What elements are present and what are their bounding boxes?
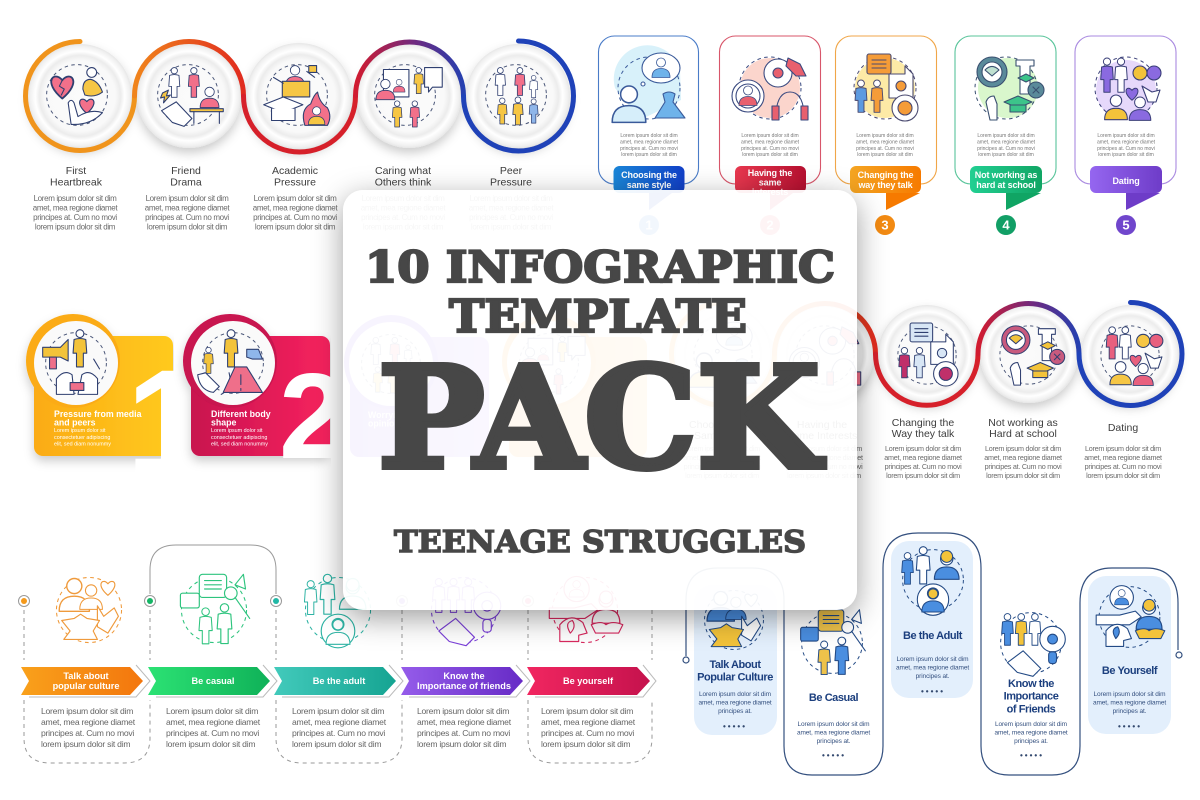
card: be yourself: •••••: [1118, 722, 1142, 731]
card: be yourself: Lorem ipsum dolor sit dim: [1094, 691, 1165, 698]
card 1: choosing the same style: 1: [645, 218, 653, 232]
body text: step 2: principes at. Cum no movi: [166, 728, 259, 738]
card: pressure from media and peers: and peers: [54, 418, 96, 428]
card: pressure from media and peers: Pressure from media: [54, 409, 142, 419]
card 5: dating: Dating: [1112, 176, 1140, 186]
body text: step 4: amet, mea regione diamet: [417, 717, 512, 727]
card 2: having the same interests: amet, mea regione diamet: [741, 139, 800, 145]
card 4: not working as hard at school: Lorem ipsum dolor sit dim: [977, 133, 1035, 139]
card 1: choosing the same style: Lorem ipsum dolor sit dim: [620, 133, 678, 139]
body text: column 3: amet, mea regione diamet: [884, 453, 962, 462]
panel: bottom-left chevron step timeline: [18, 545, 656, 763]
icon: friend drama: [158, 65, 223, 126]
panel: top-right numbered ribbon cards: [598, 36, 1176, 235]
labels: friend drama: Friend: [171, 165, 201, 177]
body text: column 4: amet, mea regione diamet: [984, 453, 1062, 462]
body text: column 1: Lorem ipsum dolor sit dim: [34, 194, 117, 203]
connector outline: [686, 533, 1178, 775]
card: pressure from media and peers: [26, 314, 209, 506]
body text: step 5: principes at. Cum no movi: [541, 728, 634, 738]
chevron: be yourself: [527, 665, 656, 697]
card: talk about popular culture: Lorem ipsum dolor sit dim: [699, 691, 771, 698]
card 5: dating: principes at. Cum no movi: [1097, 146, 1155, 152]
card 5: dating: 5: [1122, 218, 1130, 232]
body text: column 3: Lorem ipsum dolor sit dim: [885, 444, 961, 453]
card 1: choosing the same style: [598, 36, 698, 235]
chevron: know the importance of friends: [401, 665, 530, 697]
card: different body shape: shape: [211, 418, 237, 428]
card 2: having the same interests: lorem ipsum dolor sit dim: [742, 152, 798, 158]
card: talk about popular culture: principes at.: [718, 708, 752, 715]
body text: step 2: Lorem ipsum dolor sit dim: [166, 706, 258, 716]
body text: faded column 1: Lorem ipsum dolor sit dim: [684, 444, 760, 453]
dashed frame lines: [24, 545, 652, 763]
connector end dots: [683, 652, 1182, 663]
card: know the importance of friends: •••••: [1020, 751, 1044, 760]
card: be yourself: amet, mea regione diamet: [1093, 699, 1166, 706]
card: different body shape: [183, 314, 347, 484]
card: be casual: Lorem ipsum dolor sit dim: [798, 721, 869, 728]
body text: column 4: lorem ipsum dolor sit dim: [986, 471, 1060, 480]
heading: template: TEMPLATE: [449, 290, 747, 343]
body text: column 3: principes at. Cum no movi: [885, 462, 962, 471]
body text: faded column 2: Lorem ipsum dolor sit dim: [786, 444, 862, 453]
card 4: not working as hard at school: [955, 36, 1056, 235]
card 1: choosing the same style: lorem ipsum dolor sit dim: [621, 152, 677, 158]
icon: heartbreak: [47, 65, 107, 125]
labels: academic pressure: Academic: [272, 165, 318, 177]
icon: caring what others think: [375, 65, 442, 127]
body text: column 4: amet, mea regione diamet: [361, 204, 446, 212]
body text: step 3: principes at. Cum no movi: [292, 728, 385, 738]
card: be the adult: [891, 541, 973, 698]
icon: be the adult: [304, 574, 371, 648]
icon: be casual: [180, 574, 250, 644]
card: different body shape: 2: [279, 348, 347, 484]
body text: column 5: amet, mea regione diamet: [469, 204, 554, 212]
panel: middle-left numbered colour cards: [26, 314, 647, 506]
card 1: choosing the same style: same style: [627, 180, 671, 190]
panel: central white title card: [343, 190, 857, 610]
card: pressure from media and peers: 1: [126, 338, 209, 506]
card: talk about popular culture: Popular Culture: [697, 672, 773, 684]
card 5: dating: lorem ipsum dolor sit dim: [1098, 152, 1154, 158]
card: pressure from media and peers: Lorem ipsum dolor sit: [54, 428, 106, 434]
card 2: having the same interests: same: [759, 178, 781, 188]
card 5: dating: amet, mea regione diamet: [1097, 139, 1156, 145]
card: be yourself: Be Yourself: [1102, 665, 1158, 677]
body text: column 4: principes at. Cum no movi: [985, 462, 1062, 471]
icon: choosing the same style (faded): [688, 322, 757, 387]
card 1: choosing the same style: amet, mea regione diamet: [620, 139, 679, 145]
body text: column 1: principes at. Cum no movi: [33, 213, 117, 222]
body text: column 3: principes at. Cum no movi: [253, 213, 337, 222]
card 4: not working as hard at school: lorem ipsum dolor sit dim: [978, 152, 1034, 158]
body text: step 1: lorem ipsum dolor sit dim: [41, 739, 130, 749]
card 2: having the same interests: 2: [766, 218, 774, 232]
body text: step 5: amet, mea regione diamet: [541, 717, 636, 727]
timeline dots: [18, 596, 534, 606]
icon: peer pressure: [486, 65, 546, 125]
card: different body shape: Lorem ipsum dolor sit: [211, 428, 263, 434]
card: be casual: •••••: [822, 751, 846, 760]
card: faded purple card behind panel: Worrying about: [368, 410, 433, 420]
card 2: having the same interests: Lorem ipsum dolor sit dim: [741, 133, 799, 139]
card 4: not working as hard at school: principes at. Cum no movi: [977, 146, 1035, 152]
card 4: not working as hard at school: amet, mea regione diamet: [977, 139, 1036, 145]
labels: changing the way they talk: Changing the: [892, 417, 954, 429]
card: know the importance of friends: amet, mea regione diamet: [994, 729, 1068, 736]
chevron: talk about popular culture: popular culture: [53, 681, 119, 691]
icon: changing the way they talk: [898, 323, 958, 386]
card: be yourself: principes at.: [1113, 708, 1147, 715]
card: know the importance of friends: Lorem ipsum dolor sit dim: [995, 721, 1067, 728]
labels: first heartbreak: First: [66, 165, 86, 177]
card 3: changing the way they talk: way they talk: [857, 180, 914, 190]
body text: column 4: Lorem ipsum dolor sit dim: [362, 194, 445, 203]
card: pressure from media and peers: consectetuer adipiscing: [54, 435, 110, 441]
card: talk about popular culture: [694, 585, 777, 735]
labels: faded having the same interests: Having the: [797, 419, 847, 431]
body text: column 5: amet, mea regione diamet: [1084, 453, 1162, 462]
card 3: changing the way they talk: lorem ipsum dolor sit dim: [857, 152, 913, 158]
card 1: choosing the same style: principes at. Cum no movi: [620, 146, 678, 152]
card 4: not working as hard at school: 4: [1002, 218, 1010, 232]
card: different body shape: elit, sed diam nonummy: [211, 442, 268, 448]
labels: friend drama: Drama: [170, 176, 202, 188]
labels: academic pressure: Pressure: [274, 176, 316, 188]
body text: faded column 1: lorem ipsum dolor sit dim: [685, 471, 759, 480]
serpentine ring line: [25, 41, 573, 152]
body text: faded column 2: principes at. Cum no movi: [786, 462, 863, 471]
heading: 10 infographic: 10 INFOGRAPHIC: [365, 243, 835, 293]
icon: know the importance of friends: [431, 577, 501, 646]
body text: step 3: amet, mea regione diamet: [292, 717, 387, 727]
card: faded purple card behind panel: [344, 315, 489, 457]
body text: column 5: lorem ipsum dolor sit dim: [1086, 471, 1160, 480]
card 2: having the same interests: [720, 36, 820, 235]
body text: column 4: Lorem ipsum dolor sit dim: [985, 444, 1061, 453]
card: be casual: [797, 610, 870, 760]
chevron: be yourself: Be yourself: [563, 676, 614, 686]
body text: faded column 1: amet, mea regione diamet: [683, 453, 761, 462]
card: talk about popular culture: amet, mea regione diamet: [698, 699, 772, 706]
card 3: changing the way they talk: 3: [881, 218, 889, 232]
labels: changing the way they talk: Way they talk: [892, 428, 955, 440]
card 2: having the same interests: Having the: [748, 168, 792, 178]
chevron: be casual: [148, 665, 277, 697]
labels: caring what others think: Caring what: [375, 165, 431, 177]
body text: step 2: lorem ipsum dolor sit dim: [166, 739, 255, 749]
heading: pack: PACK: [378, 337, 824, 501]
card: faded orange card behind panel: [502, 314, 647, 457]
labels: not working as hard at school: Not working as: [988, 417, 1058, 429]
body text: column 2: amet, mea regione diamet: [145, 204, 230, 212]
card 5: dating: Lorem ipsum dolor sit dim: [1097, 133, 1155, 139]
labels: faded having the same interests: Same Interests: [787, 430, 857, 442]
chevron: be casual: Be casual: [192, 676, 234, 686]
body text: column 4: lorem ipsum dolor sit dim: [363, 222, 444, 232]
body text: column 5: lorem ipsum dolor sit dim: [471, 222, 552, 232]
card 3: changing the way they talk: amet, mea regione diamet: [856, 139, 915, 145]
icon: same interests (faded): [789, 326, 861, 385]
card: faded purple card behind panel: opinions: [368, 418, 405, 428]
panel: middle-right serpentine ring timeline: [672, 302, 1182, 480]
body text: step 1: Lorem ipsum dolor sit dim: [41, 706, 133, 716]
body text: column 3: amet, mea regione diamet: [253, 204, 338, 212]
body text: faded column 1: principes at. Cum no movi: [684, 462, 761, 471]
panel: top-left serpentine ring timeline: [25, 41, 573, 232]
heading: teenage struggles: TEENAGE STRUGGLES: [394, 524, 806, 559]
body text: column 3: lorem ipsum dolor sit dim: [255, 222, 336, 232]
card 3: changing the way they talk: principes at. Cum no movi: [856, 146, 914, 152]
card 2: having the same interests: principes at. Cum no movi: [741, 146, 799, 152]
panel: bottom-right alternating tall cards: [683, 533, 1182, 775]
body text: column 5: Lorem ipsum dolor sit dim: [470, 194, 553, 203]
body text: step 5: Lorem ipsum dolor sit dim: [541, 706, 633, 716]
body text: column 1: amet, mea regione diamet: [33, 204, 118, 212]
body text: column 2: principes at. Cum no movi: [145, 213, 229, 222]
icon: dating: [1101, 326, 1163, 385]
body text: column 2: Lorem ipsum dolor sit dim: [146, 194, 229, 203]
body text: step 3: lorem ipsum dolor sit dim: [292, 739, 381, 749]
card: talk about popular culture: Talk About: [709, 659, 761, 671]
body text: faded column 2: lorem ipsum dolor sit dim: [787, 471, 861, 480]
labels: dating: Dating: [1108, 422, 1138, 434]
card: know the importance of friends: Importance: [1004, 691, 1059, 703]
card: know the importance of friends: principes at.: [1014, 738, 1048, 745]
body text: column 3: lorem ipsum dolor sit dim: [886, 471, 960, 480]
card 3: changing the way they talk: [836, 36, 936, 235]
body text: step 2: amet, mea regione diamet: [166, 717, 261, 727]
card: know the importance of friends: Know the: [1008, 678, 1054, 690]
body text: step 4: principes at. Cum no movi: [417, 728, 510, 738]
card: different body shape: Different body: [211, 409, 271, 419]
body text: column 5: principes at. Cum no movi: [469, 213, 553, 222]
chevron: talk about popular culture: Talk about: [63, 671, 109, 681]
card: be yourself: [1088, 576, 1171, 734]
card: know the importance of friends: [994, 613, 1068, 760]
body text: step 4: lorem ipsum dolor sit dim: [417, 739, 506, 749]
chevron: know the importance of friends: Know the: [443, 671, 485, 681]
chevron: be the adult: Be the adult: [313, 676, 365, 686]
card: be the adult: amet, mea regione diamet: [896, 664, 969, 671]
labels: peer pressure: Peer: [500, 165, 523, 177]
body text: step 4: Lorem ipsum dolor sit dim: [417, 706, 509, 716]
icon: be yourself: [549, 576, 623, 643]
card: be the adult: •••••: [921, 687, 945, 696]
card: be casual: principes at.: [817, 738, 851, 745]
card 4: not working as hard at school: hard at school: [976, 180, 1036, 190]
body text: column 5: Lorem ipsum dolor sit dim: [1085, 444, 1161, 453]
labels: first heartbreak: Heartbreak: [50, 176, 103, 188]
labels: faded choosing the same style: Choosing the: [689, 419, 751, 431]
card: be casual: Be Casual: [809, 692, 858, 704]
chevron: know the importance of friends: Importance of friends: [417, 681, 511, 691]
ring discs: [674, 305, 1179, 403]
icon: talk about popular culture: [56, 577, 122, 643]
card: know the importance of friends: of Friends: [1007, 703, 1056, 715]
card: be the adult: principes at.: [916, 673, 950, 680]
ring discs: [28, 43, 570, 149]
body text: column 2: lorem ipsum dolor sit dim: [147, 222, 228, 232]
labels: not working as hard at school: Hard at school: [989, 428, 1057, 440]
body text: column 3: Lorem ipsum dolor sit dim: [254, 194, 337, 203]
card 3: changing the way they talk: Changing the: [858, 170, 913, 180]
labels: faded choosing the same style: Same style: [694, 430, 746, 442]
chevron: talk about popular culture: [21, 665, 150, 697]
body text: column 4: principes at. Cum no movi: [361, 213, 445, 222]
card 2: having the same interests: interests: [752, 187, 788, 197]
body text: column 5: principes at. Cum no movi: [1085, 462, 1162, 471]
icon: not working as hard at school: [1000, 326, 1065, 385]
chevron: be the adult: [274, 665, 403, 697]
icon: academic pressure: [264, 65, 330, 125]
card: pressure from media and peers: elit, sed diam nonummy: [54, 442, 111, 448]
body text: faded column 2: amet, mea regione diamet: [785, 453, 863, 462]
card: different body shape: consectetuer adipiscing: [211, 435, 267, 441]
body text: column 1: lorem ipsum dolor sit dim: [35, 222, 116, 232]
card: be the adult: Be the Adult: [903, 630, 963, 642]
card 5: dating: [1075, 36, 1176, 235]
card 1: choosing the same style: Choosing the: [621, 170, 677, 180]
body text: step 1: principes at. Cum no movi: [41, 728, 134, 738]
card 4: not working as hard at school: Not working as: [975, 170, 1037, 180]
labels: caring what others think: Others think: [375, 176, 432, 188]
body text: step 1: amet, mea regione diamet: [41, 717, 136, 727]
serpentine ring line: [672, 302, 1182, 406]
card: be the adult: Lorem ipsum dolor sit dim: [897, 656, 968, 663]
card 3: changing the way they talk: Lorem ipsum dolor sit dim: [856, 133, 914, 139]
labels: peer pressure: Pressure: [490, 176, 532, 188]
card: talk about popular culture: •••••: [723, 722, 747, 731]
body text: step 3: Lorem ipsum dolor sit dim: [292, 706, 384, 716]
body text: step 5: lorem ipsum dolor sit dim: [541, 739, 630, 749]
card: be casual: amet, mea regione diamet: [797, 729, 870, 736]
